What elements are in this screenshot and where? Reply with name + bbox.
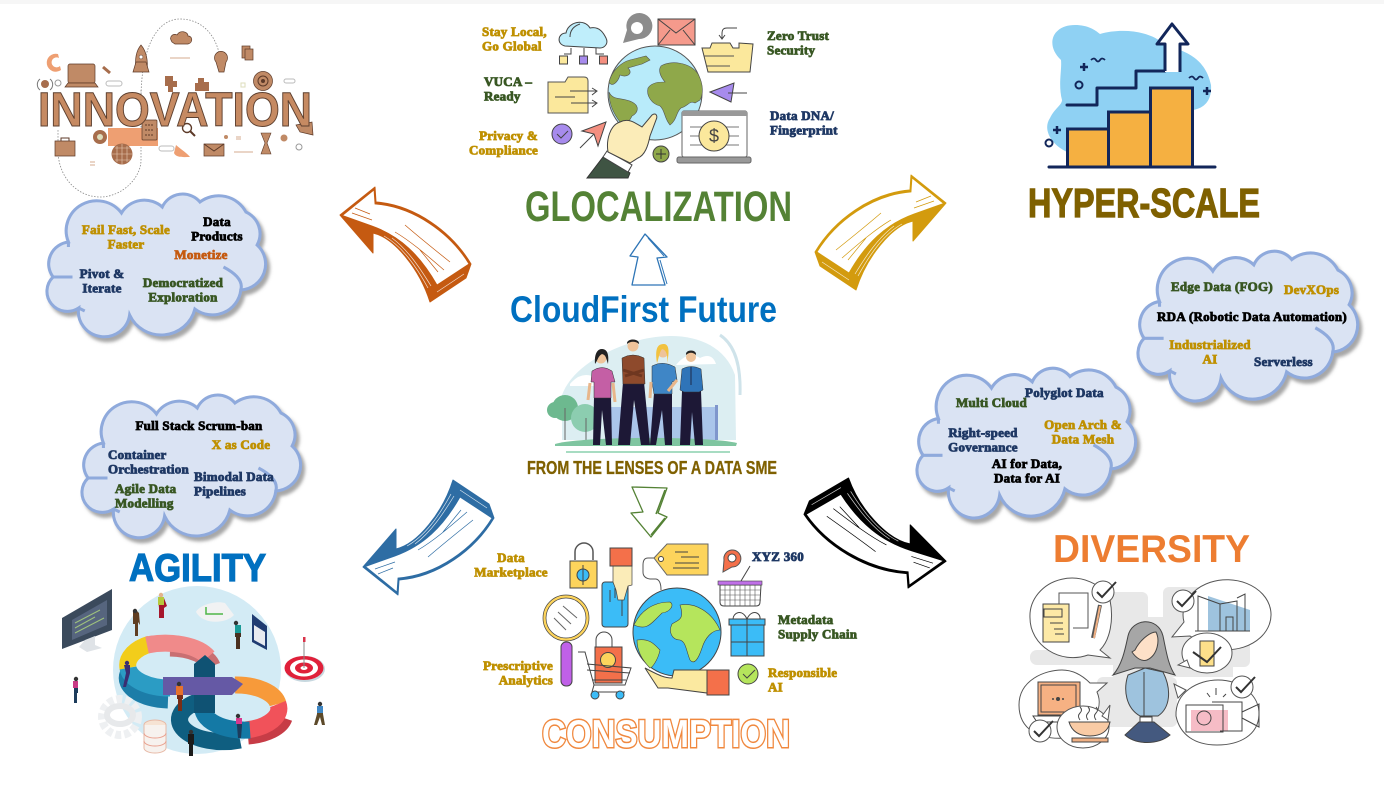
text: prescriptive: Analytics: [499, 672, 553, 688]
title: innovation: INNOVATION: [38, 84, 312, 137]
title: hyper-scale: HYPER-SCALE: [1028, 180, 1260, 226]
card and pointing hand: [602, 548, 632, 627]
title: glocalization: GLOCALIZATION: [525, 183, 792, 231]
panel: agility: [62, 395, 325, 756]
text: multi cloud: Multi Cloud: [956, 395, 1028, 410]
text: data products: Data: [203, 214, 231, 229]
folder left: [548, 77, 597, 113]
gift: [729, 612, 765, 656]
illustration: people: [547, 335, 740, 452]
check marks: [1029, 581, 1255, 742]
price tag: [643, 544, 708, 590]
arrow: black to diversity: [804, 478, 946, 588]
text: devxops: DevXOps: [1284, 282, 1339, 297]
text: industrialized ai: AI: [1203, 352, 1217, 366]
text: privacy: Privacy &: [479, 128, 538, 143]
text: metadata: Supply Chain: [778, 626, 858, 642]
magnifier: [543, 595, 589, 686]
database: [144, 720, 166, 753]
infinity loop: [127, 643, 284, 742]
text: polyglot: Polyglot Data: [1025, 385, 1104, 400]
text: ai for data: AI for Data,: [992, 456, 1062, 471]
clock card: [196, 602, 234, 622]
arrow: down small: [631, 487, 667, 537]
text: ai for data: Data for AI: [994, 470, 1060, 486]
text: xyz 360: XYZ 360: [752, 549, 804, 564]
text: privacy: Compliance: [469, 142, 538, 158]
text: x as code: X as Code: [212, 437, 270, 452]
cloud: agility: [82, 395, 301, 538]
agility illustration: [62, 586, 325, 756]
text: data products: Products: [191, 228, 243, 244]
panel: glocalization: [469, 13, 838, 231]
text: full stack: Full Stack Scrum-ban: [135, 418, 263, 433]
bubble: laptop: [1019, 670, 1107, 738]
arrow: orange to innovation: [340, 187, 471, 302]
text: zero trust: Security: [767, 42, 815, 58]
text: data dna: Fingerprint: [770, 122, 838, 138]
text: data marketplace: Marketplace: [474, 564, 548, 580]
poster: [252, 614, 267, 650]
person 3: [650, 344, 677, 445]
arrow: up small: [630, 234, 667, 285]
backdrop circle: [113, 586, 281, 754]
text: prescriptive: Prescriptive: [483, 658, 553, 673]
text: bimodal: Bimodal Data: [194, 469, 274, 484]
panel: innovation: [37, 19, 313, 337]
check circle: [552, 124, 572, 144]
text: right-speed: Governance: [948, 440, 1018, 454]
title: consumption: CONSUMPTION: [542, 713, 790, 756]
text: stay local: Stay Local,: [482, 24, 547, 39]
lock: [570, 543, 597, 588]
bubble: camera: [1174, 680, 1259, 745]
hand pointing: [587, 114, 657, 178]
cloud: hyper-scale: [1138, 251, 1358, 401]
text: metadata: Metadata: [778, 612, 833, 627]
text: rda: RDA (Robotic Data Automation): [1157, 309, 1347, 324]
scene backdrop: [547, 335, 740, 452]
envelope: [658, 19, 695, 45]
gear: [102, 699, 138, 735]
innovation illustration: [37, 19, 313, 197]
globe: [608, 46, 702, 140]
person 1: [588, 349, 615, 445]
hyper-scale chart illustration: [1046, 24, 1215, 167]
shopping cart and bag: [578, 632, 631, 699]
text: container: Orchestration: [108, 462, 190, 476]
text: edge data: Edge Data (FOG): [1171, 279, 1273, 294]
globe: [633, 588, 721, 676]
target: [284, 637, 325, 682]
panel: consumption: [474, 543, 858, 756]
text: vuca: VUCA –: [484, 74, 532, 89]
consumption illustration: [543, 543, 765, 699]
text: open arch: Data Mesh: [1052, 432, 1115, 446]
text: fail fast: Fail Fast, Scale: [82, 222, 170, 237]
text: pivot: Iterate: [82, 280, 122, 296]
plus circle: [653, 146, 669, 162]
text: vuca: Ready: [484, 88, 521, 104]
arrow: gold to hyper-scale: [815, 175, 946, 290]
top edge band: [0, 0, 1384, 4]
folder top: [702, 28, 753, 72]
basket: [718, 566, 762, 606]
heading: cloudfirst future: CloudFirst Future: [510, 289, 777, 330]
text: democratized: Democratized: [143, 275, 223, 290]
text: monetize: Monetize: [174, 247, 228, 262]
person 4: [680, 350, 703, 445]
loop crossing: [163, 655, 243, 713]
paper plane purple: [710, 83, 747, 102]
title: agility: AGILITY: [129, 547, 266, 590]
cloud with nodes: [559, 22, 608, 64]
text: stay local: Go Global: [482, 38, 542, 54]
text: democratized: Exploration: [148, 290, 218, 304]
bubble: food: [1057, 705, 1110, 748]
person: woman: [1113, 622, 1175, 742]
text: container: Container: [108, 447, 167, 462]
holding hand: [645, 668, 729, 695]
text: zero trust: Zero Trust: [767, 28, 829, 43]
check: [738, 664, 758, 684]
paper plane red: [580, 122, 606, 148]
text: fail fast: Faster: [108, 236, 144, 252]
panel: diversity: [917, 368, 1271, 748]
text: responsible: Responsible: [768, 665, 837, 680]
arrow: blue to agility: [363, 480, 494, 595]
text: agile data: Agile Data: [115, 481, 176, 496]
map pin: [723, 550, 741, 572]
text: open arch: Open Arch &: [1044, 417, 1122, 432]
laptop with dollar: [677, 111, 751, 163]
bubble: documents: [1030, 578, 1112, 658]
glocalization illustration: [548, 13, 753, 178]
monitor: [62, 589, 112, 652]
text: industrialized ai: Industrialized: [1169, 337, 1251, 352]
subtitle: FROM THE LENSES OF A DATA SME: [527, 458, 777, 478]
text: data marketplace: Data: [497, 550, 525, 565]
diversity illustration: [1019, 578, 1271, 748]
cloud: diversity: [917, 368, 1136, 518]
text: agile data: Modelling: [115, 496, 174, 510]
text: pivot: Pivot &: [80, 266, 124, 281]
map pin: [623, 13, 652, 43]
text: responsible: AI: [768, 680, 783, 694]
text: right-speed: Right-speed: [948, 425, 1018, 440]
laptop with dollar: $: [709, 126, 719, 146]
bubble: buildings: [1172, 580, 1271, 650]
text: serverless: Serverless: [1254, 354, 1313, 369]
text: bimodal: Pipelines: [194, 484, 246, 498]
panel: hyper-scale: [1028, 24, 1358, 401]
text: data dna: Data DNA/: [770, 108, 834, 123]
bubble: phone: [1178, 633, 1232, 673]
cloud: innovation: [47, 194, 266, 337]
title: diversity: DIVERSITY: [1053, 528, 1250, 571]
person 2: [618, 340, 650, 445]
small people: [73, 593, 325, 756]
